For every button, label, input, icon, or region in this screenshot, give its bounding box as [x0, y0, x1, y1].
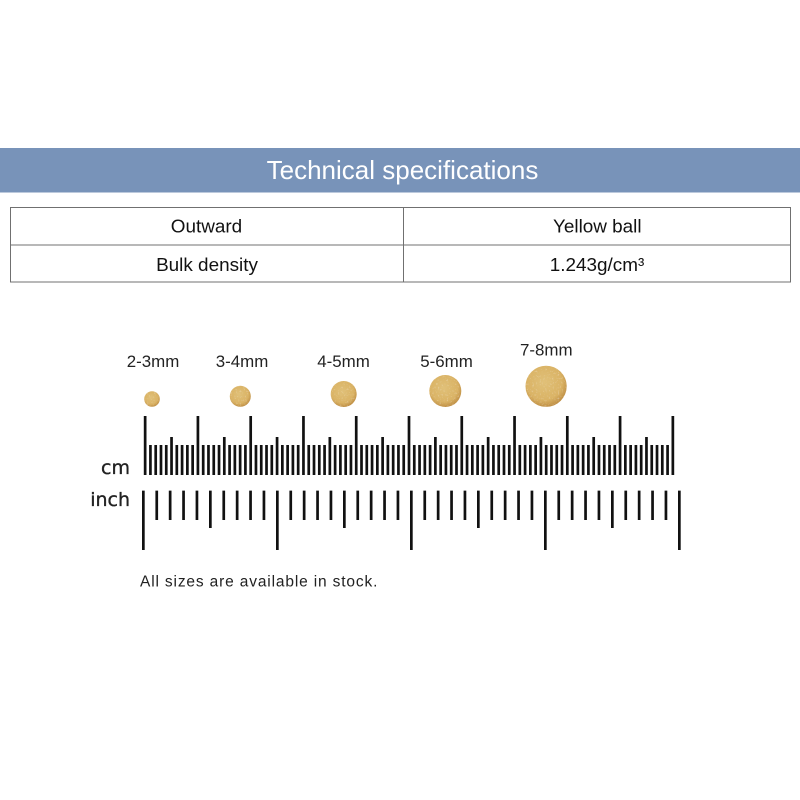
size labels — [127, 340, 573, 371]
row: bulk density: Bulk density — [156, 255, 258, 276]
centimetre ruler — [144, 426, 675, 460]
header banner — [0, 148, 800, 192]
unit label: cm: cm — [101, 457, 130, 479]
size labels: 7-8mm — [520, 340, 573, 360]
size labels: 5-6mm — [420, 352, 473, 371]
size labels: 2-3mm — [127, 352, 179, 371]
yellow balls by size — [144, 366, 567, 407]
row: outward: Outward — [171, 217, 242, 238]
heading: Technical specifications: Technical specifications — [267, 155, 538, 185]
row: outward: Yellow ball — [553, 217, 642, 238]
unit label: inch: inch — [90, 489, 130, 511]
inch ruler — [142, 505, 682, 539]
size labels: 4-5mm — [317, 352, 370, 371]
stock note: All sizes are available in stock. — [140, 574, 378, 590]
row: bulk density: 1.243g/cm³ — [550, 255, 644, 276]
specifications table — [10, 208, 790, 282]
row: bulk density — [156, 255, 644, 276]
size labels: 3-4mm — [216, 352, 268, 371]
row: outward — [171, 217, 642, 238]
